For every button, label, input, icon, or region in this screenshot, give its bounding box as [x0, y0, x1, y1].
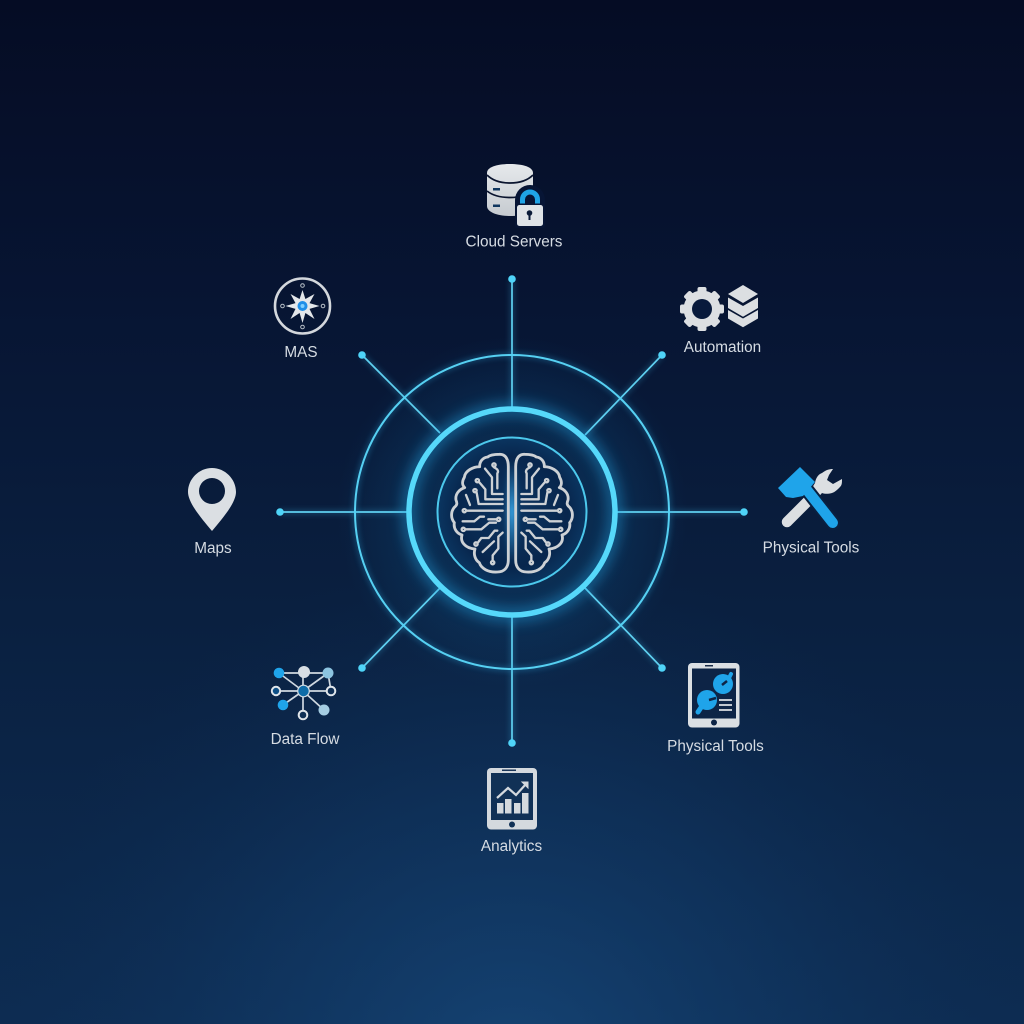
label: Analytics: Analytics: [481, 838, 542, 855]
node: Automation: [680, 285, 761, 356]
icon: map pin: [188, 468, 236, 531]
node: Physical Tools (right): [763, 467, 860, 556]
icon: tablet with growth chart: [487, 768, 537, 830]
label: Automation: Automation: [684, 339, 761, 356]
label: Data Flow: Data Flow: [271, 731, 340, 748]
node: Maps: [188, 468, 236, 531]
node: Physical Tools (lower right): [667, 663, 764, 755]
icon: circuit brain: [452, 454, 572, 572]
node: Cloud Servers: [466, 164, 563, 250]
connector lines: [276, 275, 748, 747]
icon: gear and stacked layers: [680, 285, 758, 331]
label: Cloud Servers: Cloud Servers: [466, 234, 563, 250]
icon: hammer and wrench: [778, 467, 842, 523]
label: MAS: MAS: [284, 344, 318, 361]
label: Physical Tools: Physical Tools: [763, 540, 860, 556]
node: Analytics: [481, 768, 542, 855]
node: Data Flow: [271, 666, 340, 748]
icon: database with lock: [487, 164, 545, 228]
label: Maps: Maps: [194, 540, 232, 557]
label: Physical Tools: Physical Tools: [667, 738, 764, 755]
hub rings: [355, 355, 669, 669]
icon: network graph: [272, 666, 335, 719]
node: MAS: [275, 278, 330, 361]
icon: compass: [275, 278, 330, 334]
icon: tablet with tools: [688, 663, 740, 728]
